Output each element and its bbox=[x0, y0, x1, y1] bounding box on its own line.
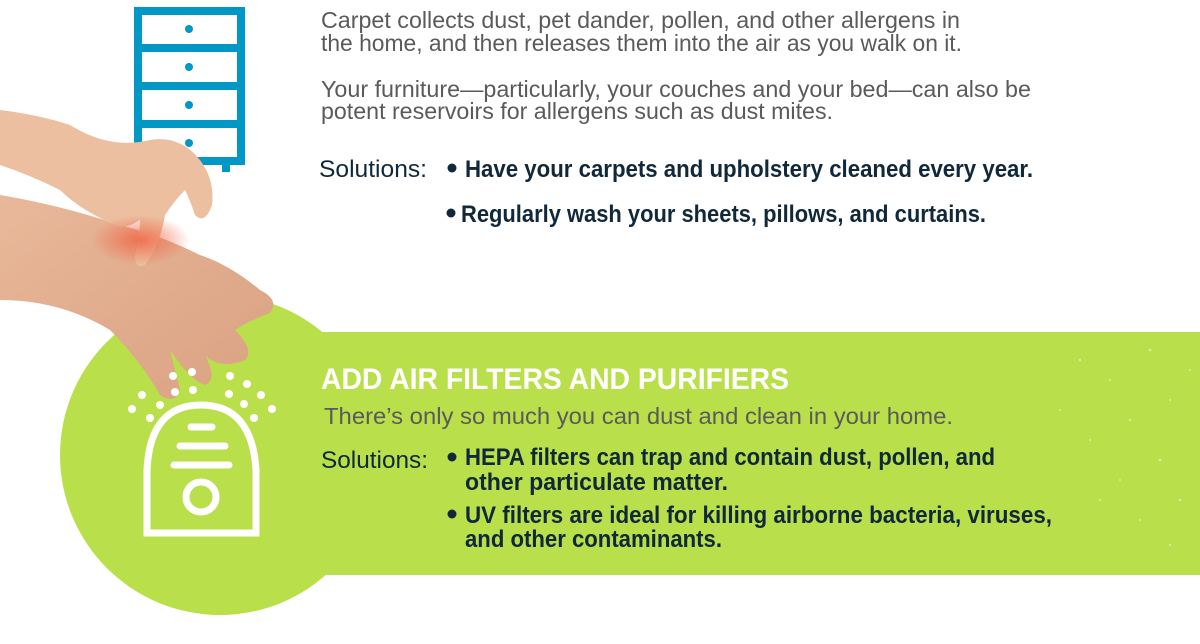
solutions: filters: HEPA filters can trap and contain dust, pollen, and bbox=[465, 444, 995, 471]
solutions: carpets: Regularly wash your sheets, pillows, and curtains. bbox=[461, 201, 986, 228]
icon: dresser bbox=[138, 11, 241, 172]
text block: carpet intro: potent reservoirs for allergens such as dust mites. bbox=[321, 98, 833, 124]
solutions: carpets: Solutions: bbox=[319, 156, 427, 183]
solutions: carpets: Have your carpets and upholstery cleaned every year. bbox=[465, 156, 1033, 183]
green band panel bbox=[60, 295, 1200, 615]
solutions: filters: other particulate matter. bbox=[465, 469, 728, 496]
solutions: filters: and other contaminants. bbox=[465, 526, 722, 553]
icon: air purifier bbox=[128, 368, 276, 533]
text block: carpet intro: Your furniture—particularly, your couches and your bed—can also be bbox=[321, 76, 1031, 102]
dust particles decoration bbox=[1059, 349, 1191, 546]
photo: scratching hands bbox=[0, 110, 273, 399]
text block: carpet intro: the home, and then releases them into the air as you walk on it. bbox=[321, 30, 962, 56]
solutions: carpets bbox=[319, 156, 1033, 228]
solutions: filters: Solutions: bbox=[321, 447, 428, 474]
text block: carpet intro bbox=[321, 7, 1031, 124]
heading: add air filters: ADD AIR FILTERS AND PURIFIERS bbox=[321, 363, 789, 396]
solutions: filters bbox=[321, 444, 1052, 553]
text block: carpet intro: Carpet collects dust, pet dander, pollen, and other allergens in bbox=[321, 7, 960, 33]
solutions: filters: UV filters are ideal for killing airborne bacteria, viruses, bbox=[465, 502, 1052, 529]
text: dust and clean: There’s only so much you can dust and clean in your home. bbox=[324, 403, 953, 429]
